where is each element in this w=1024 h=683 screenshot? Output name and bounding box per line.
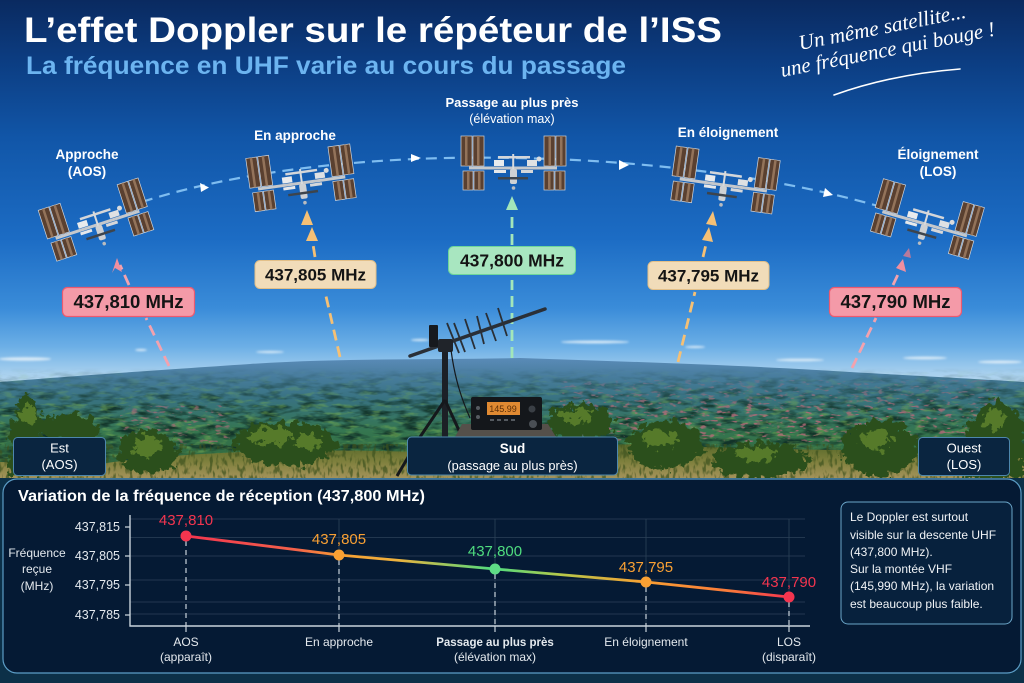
line chart: (élévation max) (454, 650, 536, 664)
direction box: Ouest: (LOS) (947, 457, 981, 472)
note box (841, 502, 1012, 624)
line chart: AOS (173, 635, 199, 649)
line chart: (disparaît) (762, 650, 816, 664)
label: Eloignement LOS: Éloignement (897, 147, 979, 162)
line chart: Fréquence (8, 546, 66, 560)
line chart: 437,805 (75, 549, 120, 563)
freq badge 437,810: 437,810 MHz (73, 291, 184, 312)
label: Passage au plus pres: Passage au plus près (446, 95, 578, 110)
signal arrow: approche (301, 210, 340, 357)
line chart: En éloignement (604, 635, 688, 649)
label: Passage au plus pres: (élévation max) (469, 112, 555, 126)
ISS approche (246, 144, 357, 212)
line chart (8, 512, 816, 664)
freq badge 437,795: 437,795 MHz (658, 266, 759, 286)
freq badge 437,795 (648, 262, 769, 290)
handwritten note (778, 0, 997, 95)
label: Approche AOS: Approche (55, 147, 119, 162)
signal arrow: LOS (852, 248, 911, 368)
note box: (437,800 MHz). (850, 545, 933, 559)
note box: est beaucoup plus faible. (850, 597, 983, 611)
freq badge 437,805 (255, 260, 376, 288)
label: Approche AOS (55, 147, 119, 179)
direction box: Est (14, 438, 106, 476)
freq badge 437,810 (62, 288, 194, 316)
note box: visible sur la descente UHF (850, 528, 996, 542)
line chart: reçue (22, 562, 52, 576)
line chart: Passage au plus près (436, 637, 554, 649)
orbit arrowheads (200, 154, 833, 197)
line chart: 437,810 (159, 512, 213, 529)
label: Approche AOS: (AOS) (68, 164, 106, 179)
freq badge 437,805: 437,805 MHz (265, 266, 366, 284)
direction box: Sud: Sud (500, 441, 525, 456)
direction box: Est: (AOS) (41, 457, 78, 472)
line chart: 437,815 (75, 520, 120, 534)
line chart: 437,805 (312, 531, 366, 548)
direction box: Ouest (918, 438, 1010, 476)
radio transceiver: 145.99 (489, 404, 517, 414)
direction box: Sud (408, 437, 618, 475)
line chart: LOS (777, 635, 801, 649)
orbit arc (142, 158, 878, 206)
chart heading: Variation de la fréquence de réception (437,800 MHz) (18, 488, 425, 505)
landscape (0, 358, 1024, 480)
freq badge 437,800 (448, 246, 576, 274)
note box: (145,990 MHz), la variation (850, 579, 994, 593)
signal arrow: zenith (506, 196, 518, 358)
bottom strip (0, 478, 1024, 683)
title: L’effet Doppler sur le répéteur de l’ISS (24, 11, 722, 50)
freq badge 437,790: 437,790 MHz (840, 291, 951, 312)
freq badge 437,790 (830, 288, 962, 316)
direction box: Sud: (passage au plus près) (447, 458, 578, 473)
note box: Sur la montée VHF (850, 562, 952, 576)
ISS AOS (38, 178, 155, 262)
antenna on tripod (397, 308, 545, 476)
ISS LOS (869, 179, 984, 260)
label: Eloignement LOS (897, 147, 979, 179)
signal arrow: eloignement (678, 211, 717, 362)
radio transceiver (455, 397, 556, 437)
label: Passage au plus pres (446, 95, 578, 126)
label: Eloignement LOS: (LOS) (920, 164, 956, 179)
handwritten note: une fréquence qui bouge ! (778, 17, 997, 82)
line chart: 437,795 (619, 559, 673, 576)
ISS zenith (461, 136, 566, 190)
clouds (0, 339, 1022, 363)
note box: Le Doppler est surtout (850, 510, 969, 524)
line chart: 437,795 (75, 578, 120, 592)
direction box: Ouest: Ouest (947, 440, 982, 456)
line chart: 437,790 (762, 574, 816, 591)
direction box: Est: Est (50, 440, 69, 456)
subtitle: La fréquence en UHF varie au cours du passage (26, 52, 626, 80)
ISS eloignement (669, 146, 780, 214)
foreground bushes (8, 392, 1024, 478)
line chart: 437,785 (75, 608, 120, 622)
sky background (0, 0, 1024, 392)
foreground grass (0, 444, 1024, 478)
line chart: (apparaît) (160, 650, 212, 664)
line chart: En approche (305, 635, 373, 649)
handwritten note: Un même satellite... (796, 0, 968, 55)
label: En eloignement: En éloignement (678, 125, 779, 140)
line chart: 437,800 (468, 543, 522, 560)
line chart: (MHz) (21, 579, 53, 593)
signal arrow: AOS (112, 258, 169, 366)
freq badge 437,800: 437,800 MHz (460, 250, 564, 270)
label: En approche: En approche (254, 128, 336, 143)
chart panel (3, 479, 1021, 673)
